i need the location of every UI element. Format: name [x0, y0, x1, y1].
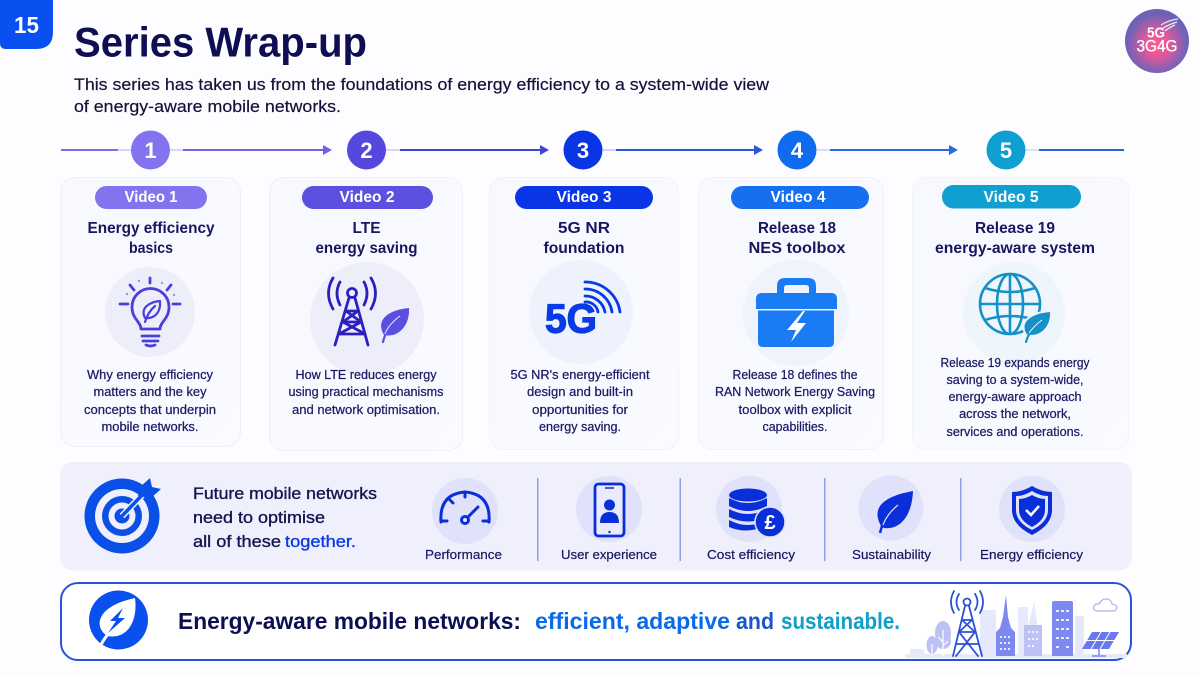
item: sustainability — [852, 476, 932, 562]
subtitle: of energy-aware mobile networks. — [74, 97, 341, 116]
pill: video 2: Video 2 — [340, 189, 395, 206]
pill: video 5: Video 5 — [984, 189, 1039, 206]
panel: video 5 — [912, 178, 1128, 450]
description: video 5 — [940, 356, 1090, 439]
step 4 — [778, 130, 816, 170]
step 5 — [986, 130, 1026, 170]
panel: video 4 — [698, 178, 884, 450]
text: future mobile networks: all of these — [193, 532, 281, 551]
step 3: 3 — [577, 138, 589, 163]
heading: 5G NR foundation: 5G NR — [558, 220, 610, 237]
description: video 4: Release 18 defines the — [732, 368, 858, 382]
heading: release 18 NES toolbox: Release 18 — [758, 220, 836, 237]
icon: target with arrow — [84, 478, 161, 554]
item: user experience — [561, 476, 657, 562]
item: performance: Performance — [425, 547, 502, 562]
logo: 5G 3G4G: 3G4G — [1136, 38, 1178, 56]
heading: release 19 energy-aware system: energy-aware system — [935, 240, 1095, 257]
icon: light bulb with leaf — [105, 267, 195, 357]
icon: globe with leaf — [963, 262, 1065, 364]
illustration: city skyline with tower and solar panel — [905, 591, 1127, 658]
slide number badge — [0, 0, 53, 49]
icon: 5G signal — [529, 260, 633, 364]
step 5: 5 — [1000, 138, 1012, 163]
text: future mobile networks — [193, 484, 377, 551]
description: video 5: saving to a system-wide, — [946, 373, 1084, 387]
description: video 3: 5G NR's energy-efficient — [510, 368, 650, 382]
description: video 1 — [84, 368, 216, 434]
banner text: efficient, adaptive — [535, 608, 730, 634]
description: video 4: capabilities. — [762, 420, 828, 434]
description: video 2: and network optimisation. — [292, 403, 440, 417]
heading: LTE energy saving: LTE — [352, 220, 381, 237]
slide number badge: 15 — [14, 12, 39, 38]
timeline — [61, 130, 1124, 170]
description: video 3: energy saving. — [539, 420, 621, 434]
description: video 2: How LTE reduces energy — [296, 368, 437, 382]
heading: LTE energy saving — [316, 220, 418, 257]
banner text: and — [736, 608, 774, 634]
description: video 3 — [510, 368, 650, 434]
subtitle: This series has taken us from the foundations of energy efficiency to a system-wide view — [74, 75, 770, 94]
heading: energy efficiency basics: Energy efficiency — [88, 220, 215, 237]
heading: release 18 NES toolbox: NES toolbox — [748, 240, 846, 257]
icon: 5G signal: 5G — [545, 296, 597, 342]
heading: LTE energy saving: energy saving — [316, 240, 418, 257]
item: cost efficiency: Cost efficiency — [707, 547, 796, 562]
description: video 5: Release 19 expands energy — [940, 356, 1090, 370]
description: video 1: matters and the key — [94, 385, 207, 399]
item: performance — [425, 478, 502, 562]
heading: release 19 energy-aware system: Release 19 — [975, 220, 1055, 237]
description: video 3: design and built-in — [527, 385, 633, 399]
step 3 — [564, 130, 602, 170]
item: sustainability: Sustainability — [852, 547, 932, 562]
subtitle — [74, 75, 770, 116]
text: future mobile networks: Future mobile networks — [193, 484, 377, 503]
banner text — [178, 608, 900, 634]
description: video 4: toolbox with explicit — [738, 403, 852, 417]
logo: 5G 3G4G — [1125, 9, 1189, 73]
text: future mobile networks: together. — [285, 532, 356, 551]
heading: 5G NR foundation: foundation — [544, 240, 624, 257]
title: Series Wrap-up — [74, 18, 367, 66]
item: user experience: User experience — [561, 547, 657, 562]
item: energy efficiency: Energy efficiency — [980, 547, 1084, 562]
step 4: 4 — [791, 138, 804, 163]
description: video 5: energy-aware approach — [948, 390, 1082, 404]
heading: release 19 energy-aware system — [935, 220, 1095, 257]
icon: leaf with lightning — [89, 590, 148, 650]
icon: cell tower with leaf — [310, 262, 424, 376]
panel: video 1 — [60, 178, 240, 446]
pill: video 2 — [302, 186, 433, 209]
item: cost efficiency — [707, 476, 796, 562]
heading: energy efficiency basics: basics — [129, 240, 173, 257]
banner: energy-aware mobile networks — [61, 583, 1131, 660]
heading: release 18 NES toolbox — [748, 220, 846, 257]
item: cost efficiency: £ — [764, 512, 776, 534]
panel: optimise together — [60, 462, 1132, 570]
description: video 1: mobile networks. — [102, 420, 198, 434]
step 2 — [347, 130, 386, 170]
description: video 1: concepts that underpin — [84, 403, 216, 417]
panel: video 3 — [490, 178, 678, 450]
step 1 — [131, 130, 170, 170]
pill: video 4 — [731, 186, 869, 209]
heading: energy efficiency basics — [88, 220, 215, 257]
description: video 3: opportunities for — [532, 403, 628, 417]
banner text: sustainable. — [781, 608, 900, 634]
step 1: 1 — [144, 138, 157, 163]
pill: video 3: Video 3 — [556, 189, 612, 206]
description: video 5: services and operations. — [946, 425, 1084, 439]
heading: 5G NR foundation — [544, 220, 624, 257]
item: energy efficiency — [980, 476, 1084, 562]
pill: video 5 — [942, 185, 1081, 208]
text: future mobile networks: need to optimise — [193, 508, 325, 527]
description: video 1: Why energy efficiency — [87, 368, 214, 382]
icon: toolbox with lightning — [743, 260, 849, 366]
step 2: 2 — [360, 138, 373, 163]
description: video 4: RAN Network Energy Saving — [715, 385, 875, 399]
logo: 5G 3G4G: 5G — [1147, 24, 1165, 42]
description: video 4 — [715, 368, 875, 434]
banner text: Energy-aware mobile networks: — [178, 608, 521, 634]
pill: video 1: Video 1 — [124, 189, 178, 206]
pill: video 3 — [515, 186, 653, 209]
pill: video 4: Video 4 — [770, 189, 826, 206]
description: video 2: using practical mechanisms — [288, 385, 444, 399]
panel: video 2 — [270, 178, 462, 450]
description: video 5: across the network, — [959, 407, 1071, 421]
description: video 2 — [288, 368, 444, 417]
pill: video 1 — [95, 186, 207, 209]
